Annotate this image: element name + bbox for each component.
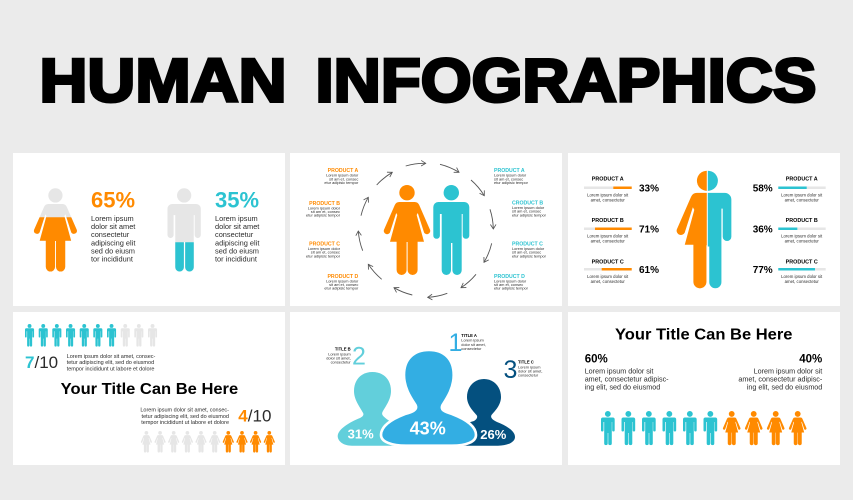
callout: title A: dolor sit amet, xyxy=(461,342,486,347)
row: product B left: Lorem ipsum dolor sit xyxy=(587,233,629,238)
label: product C left xyxy=(306,242,341,258)
label: product D right: sit am et, consec xyxy=(494,282,523,287)
label: product D right: Lorem ipsum dolor xyxy=(494,278,527,283)
label: product B left: Lorem ipsum dolor xyxy=(308,205,341,210)
panel: head silhouettes xyxy=(290,312,562,465)
text block: lower description: tetur adipiscing elit, sed do eiusmod xyxy=(142,414,229,420)
panel: gender percentage xyxy=(13,153,285,306)
label: product B right: Lorem ipsum dolor xyxy=(512,205,545,210)
row: product C right xyxy=(753,260,826,284)
pictogram: 4 of 10 women xyxy=(141,431,275,453)
label: product D left: sit am et, consec xyxy=(329,282,358,287)
label: product B right xyxy=(512,200,547,217)
icon: man 35 percent xyxy=(168,188,201,272)
row: product A right: amet, consectetur xyxy=(785,198,819,203)
stat: 7/10: 7/10 xyxy=(25,353,58,372)
label: product D left: etur adipisic tempor xyxy=(324,286,359,291)
row: product A right: Lorem ipsum dolor sit xyxy=(781,193,823,198)
stat: 40 percent: 40% xyxy=(799,354,822,366)
text block: right description: consectetur xyxy=(215,230,254,239)
main title xyxy=(40,47,816,115)
label: product C left: PRODUCT C xyxy=(309,242,340,248)
row: product B right xyxy=(753,218,826,243)
stat: 35 percent: 35% xyxy=(215,188,259,212)
text block: left description: adipiscing elit xyxy=(91,238,135,247)
stat: 65 percent: 65% xyxy=(91,188,135,212)
label: product A left: PRODUCT A xyxy=(328,168,359,174)
row: product A right: PRODUCT A xyxy=(786,177,818,183)
silhouette: title B 31 percent xyxy=(338,372,405,446)
callout: title A: TITLE A xyxy=(461,333,477,338)
label: product D left xyxy=(324,274,359,291)
text block: left description: consectetur xyxy=(91,230,130,239)
row: product A right: 58% xyxy=(753,184,773,194)
callout: title A: consectetur xyxy=(461,346,482,351)
row: product B right: PRODUCT B xyxy=(786,218,818,224)
label: product C right: etur adipisic tempor xyxy=(512,253,547,258)
text block: left description: dolor sit amet xyxy=(91,222,135,231)
callout: title A: Lorem ipsum xyxy=(461,338,484,343)
row: product C left: amet, consectetur xyxy=(591,279,625,284)
label: product A right xyxy=(494,168,529,185)
row: product A left xyxy=(584,177,659,203)
row: product A left: amet, consectetur xyxy=(591,198,625,203)
panel: split figure products xyxy=(568,153,840,306)
label: product C left: Lorem ipsum dolor xyxy=(308,246,341,251)
text block: left description: sed do eiusm xyxy=(91,246,135,256)
label: product B left: PRODUCT B xyxy=(309,201,340,207)
callout: title A: 1 xyxy=(448,329,462,357)
silhouette: title A 43 percent xyxy=(381,350,476,446)
text block: right description: Lorem ipsum xyxy=(215,214,258,223)
row: product B left: 71% xyxy=(639,224,659,236)
row: product C left: 61% xyxy=(639,265,659,276)
callout: title B: consectetur xyxy=(331,360,351,365)
callout: title B: TITLE B xyxy=(335,347,351,352)
label: product D right: etur adipisic tempor xyxy=(494,286,529,291)
row: product A right xyxy=(753,177,826,203)
callout: title B xyxy=(326,342,366,370)
panel: ratio pictograms xyxy=(13,312,285,465)
label: product B right: sit am et, consec xyxy=(512,209,541,214)
callout: title B: 2 xyxy=(352,342,366,370)
label: product C right: Lorem ipsum dolor xyxy=(512,246,545,251)
label: product B left: sit am et, consec xyxy=(311,209,340,214)
text block: upper description: Lorem ipsum dolor sit amet, consec- xyxy=(67,354,156,360)
icon: large man xyxy=(433,185,469,275)
row: product C left: Lorem ipsum dolor sit xyxy=(587,274,629,279)
row: product C right: PRODUCT C xyxy=(786,260,818,266)
label: product B right: etur adipisic tempor xyxy=(512,212,547,217)
value: 26 percent: 26% xyxy=(480,427,507,442)
text block: right description: tor incididunt xyxy=(215,255,257,264)
text block: right: Lorem ipsum dolor sit xyxy=(754,366,822,375)
main title: INFOGRAPHICS xyxy=(316,47,816,115)
row: product A left: Lorem ipsum dolor sit xyxy=(587,193,629,198)
label: product A left: etur adipisic tempor xyxy=(324,180,359,185)
arrows: circular cycle xyxy=(358,163,493,297)
text block: right description: sed do eiusm xyxy=(215,246,259,256)
label: product A right: Lorem ipsum dolor xyxy=(494,173,527,178)
heading: Your Title Can Be Here xyxy=(615,326,793,343)
label: product B left: etur adipisic tempor xyxy=(306,213,341,218)
text block: left: ing elit, sed do eiusmod xyxy=(585,383,660,392)
label: product A right: sit am et, consec xyxy=(494,176,523,181)
row: product C right: 77% xyxy=(753,265,773,276)
row: product B right: amet, consectetur xyxy=(785,238,819,243)
panel: 60/40 split xyxy=(568,312,840,465)
text block: right description: dolor sit amet xyxy=(215,222,259,231)
text block: lower description: tempor incididunt ut labore et dolore xyxy=(141,420,229,426)
icon: woman 65 percent xyxy=(34,188,77,272)
row: product C right: amet, consectetur xyxy=(785,279,819,284)
icon: half woman half man xyxy=(677,171,737,288)
label: product D left: Lorem ipsum dolor xyxy=(326,278,359,283)
heading: Your Title Can Be Here xyxy=(61,381,238,398)
callout: title C: TITLE C xyxy=(518,360,534,365)
row: product C right: Lorem ipsum dolor sit xyxy=(781,274,823,279)
panel: product cycle xyxy=(290,153,562,306)
label: product B left xyxy=(306,201,341,218)
text block: left description: Lorem ipsum xyxy=(91,214,134,223)
label: product A left: sit am et, consec xyxy=(329,176,358,181)
label: product B right: CRODUCT B xyxy=(512,200,543,206)
text block: lower description: Lorem ipsum dolor sit amet, consec- xyxy=(140,408,229,414)
text block: upper description: tempor incididunt ut labore et dolore xyxy=(67,366,154,372)
callout: title B: dolor sit amet, xyxy=(326,356,351,360)
silhouette: title C 26 percent xyxy=(460,379,515,446)
label: product C left: sit am et, consec xyxy=(311,250,340,255)
row: product A left: PRODUCT A xyxy=(592,177,624,183)
text block: left: amet, consectetur adipisc- xyxy=(585,375,669,384)
label: product D right: PRODUCT D xyxy=(494,274,525,280)
callout: title C: 3 xyxy=(504,356,517,384)
label: product C right: PRODUCT C xyxy=(512,242,543,248)
row: product B left: amet, consectetur xyxy=(591,238,625,243)
row: product B left xyxy=(584,218,659,243)
text block: left: Lorem ipsum dolor sit xyxy=(585,366,653,375)
callout: title C: consectetur xyxy=(518,373,539,378)
pictogram: 6 men 4 women xyxy=(601,411,807,445)
callout: title C: Lorem ipsum xyxy=(518,364,540,369)
label: product C right: sit am et, consec xyxy=(512,250,541,255)
callout: title B: Lorem ipsum xyxy=(328,351,351,356)
text block: left description: tor incididunt xyxy=(91,255,133,264)
label: product C right xyxy=(512,242,547,258)
text block: upper description: tetur adipiscing elit, sed do eiusmod xyxy=(67,360,154,366)
callout: title C xyxy=(504,356,542,384)
label: product D left: PRODUCT D xyxy=(327,274,359,280)
text block: right: ing elit, sed do eiusmod xyxy=(747,383,822,392)
stat: 60 percent: 60% xyxy=(585,354,608,366)
row: product B right: 36% xyxy=(753,224,773,236)
callout: title C: dolor sit amet, xyxy=(518,368,542,374)
callout: title A xyxy=(448,329,486,357)
label: product D right xyxy=(494,274,529,291)
main title: HUMAN xyxy=(40,47,286,115)
label: product C left: etur adipisic tempor xyxy=(306,253,341,258)
label: product A right: etur adipisic tempor xyxy=(494,180,529,185)
label: product A left xyxy=(324,168,359,185)
label: product A right: PRODUCT A xyxy=(494,168,525,174)
label: product A left: Lorem ipsum dolor xyxy=(326,173,359,178)
row: product A left: 33% xyxy=(639,184,659,194)
row: product C left xyxy=(584,260,659,284)
icon: large woman xyxy=(384,185,430,275)
stat: 4/10: 4/10 xyxy=(238,406,271,425)
row: product B right: Lorem ipsum dolor sit xyxy=(781,233,823,238)
text block: right: amet, consectetur adipisc- xyxy=(738,375,823,384)
value: 43 percent: 43% xyxy=(410,419,446,439)
row: product C left: PRODUCT C xyxy=(592,260,624,266)
text block: right description: adipiscing elit xyxy=(215,238,259,247)
pictogram: 7 of 10 men xyxy=(25,324,157,347)
row: product B left: PRODUCT B xyxy=(592,218,624,224)
value: 31 percent: 31% xyxy=(348,426,374,441)
